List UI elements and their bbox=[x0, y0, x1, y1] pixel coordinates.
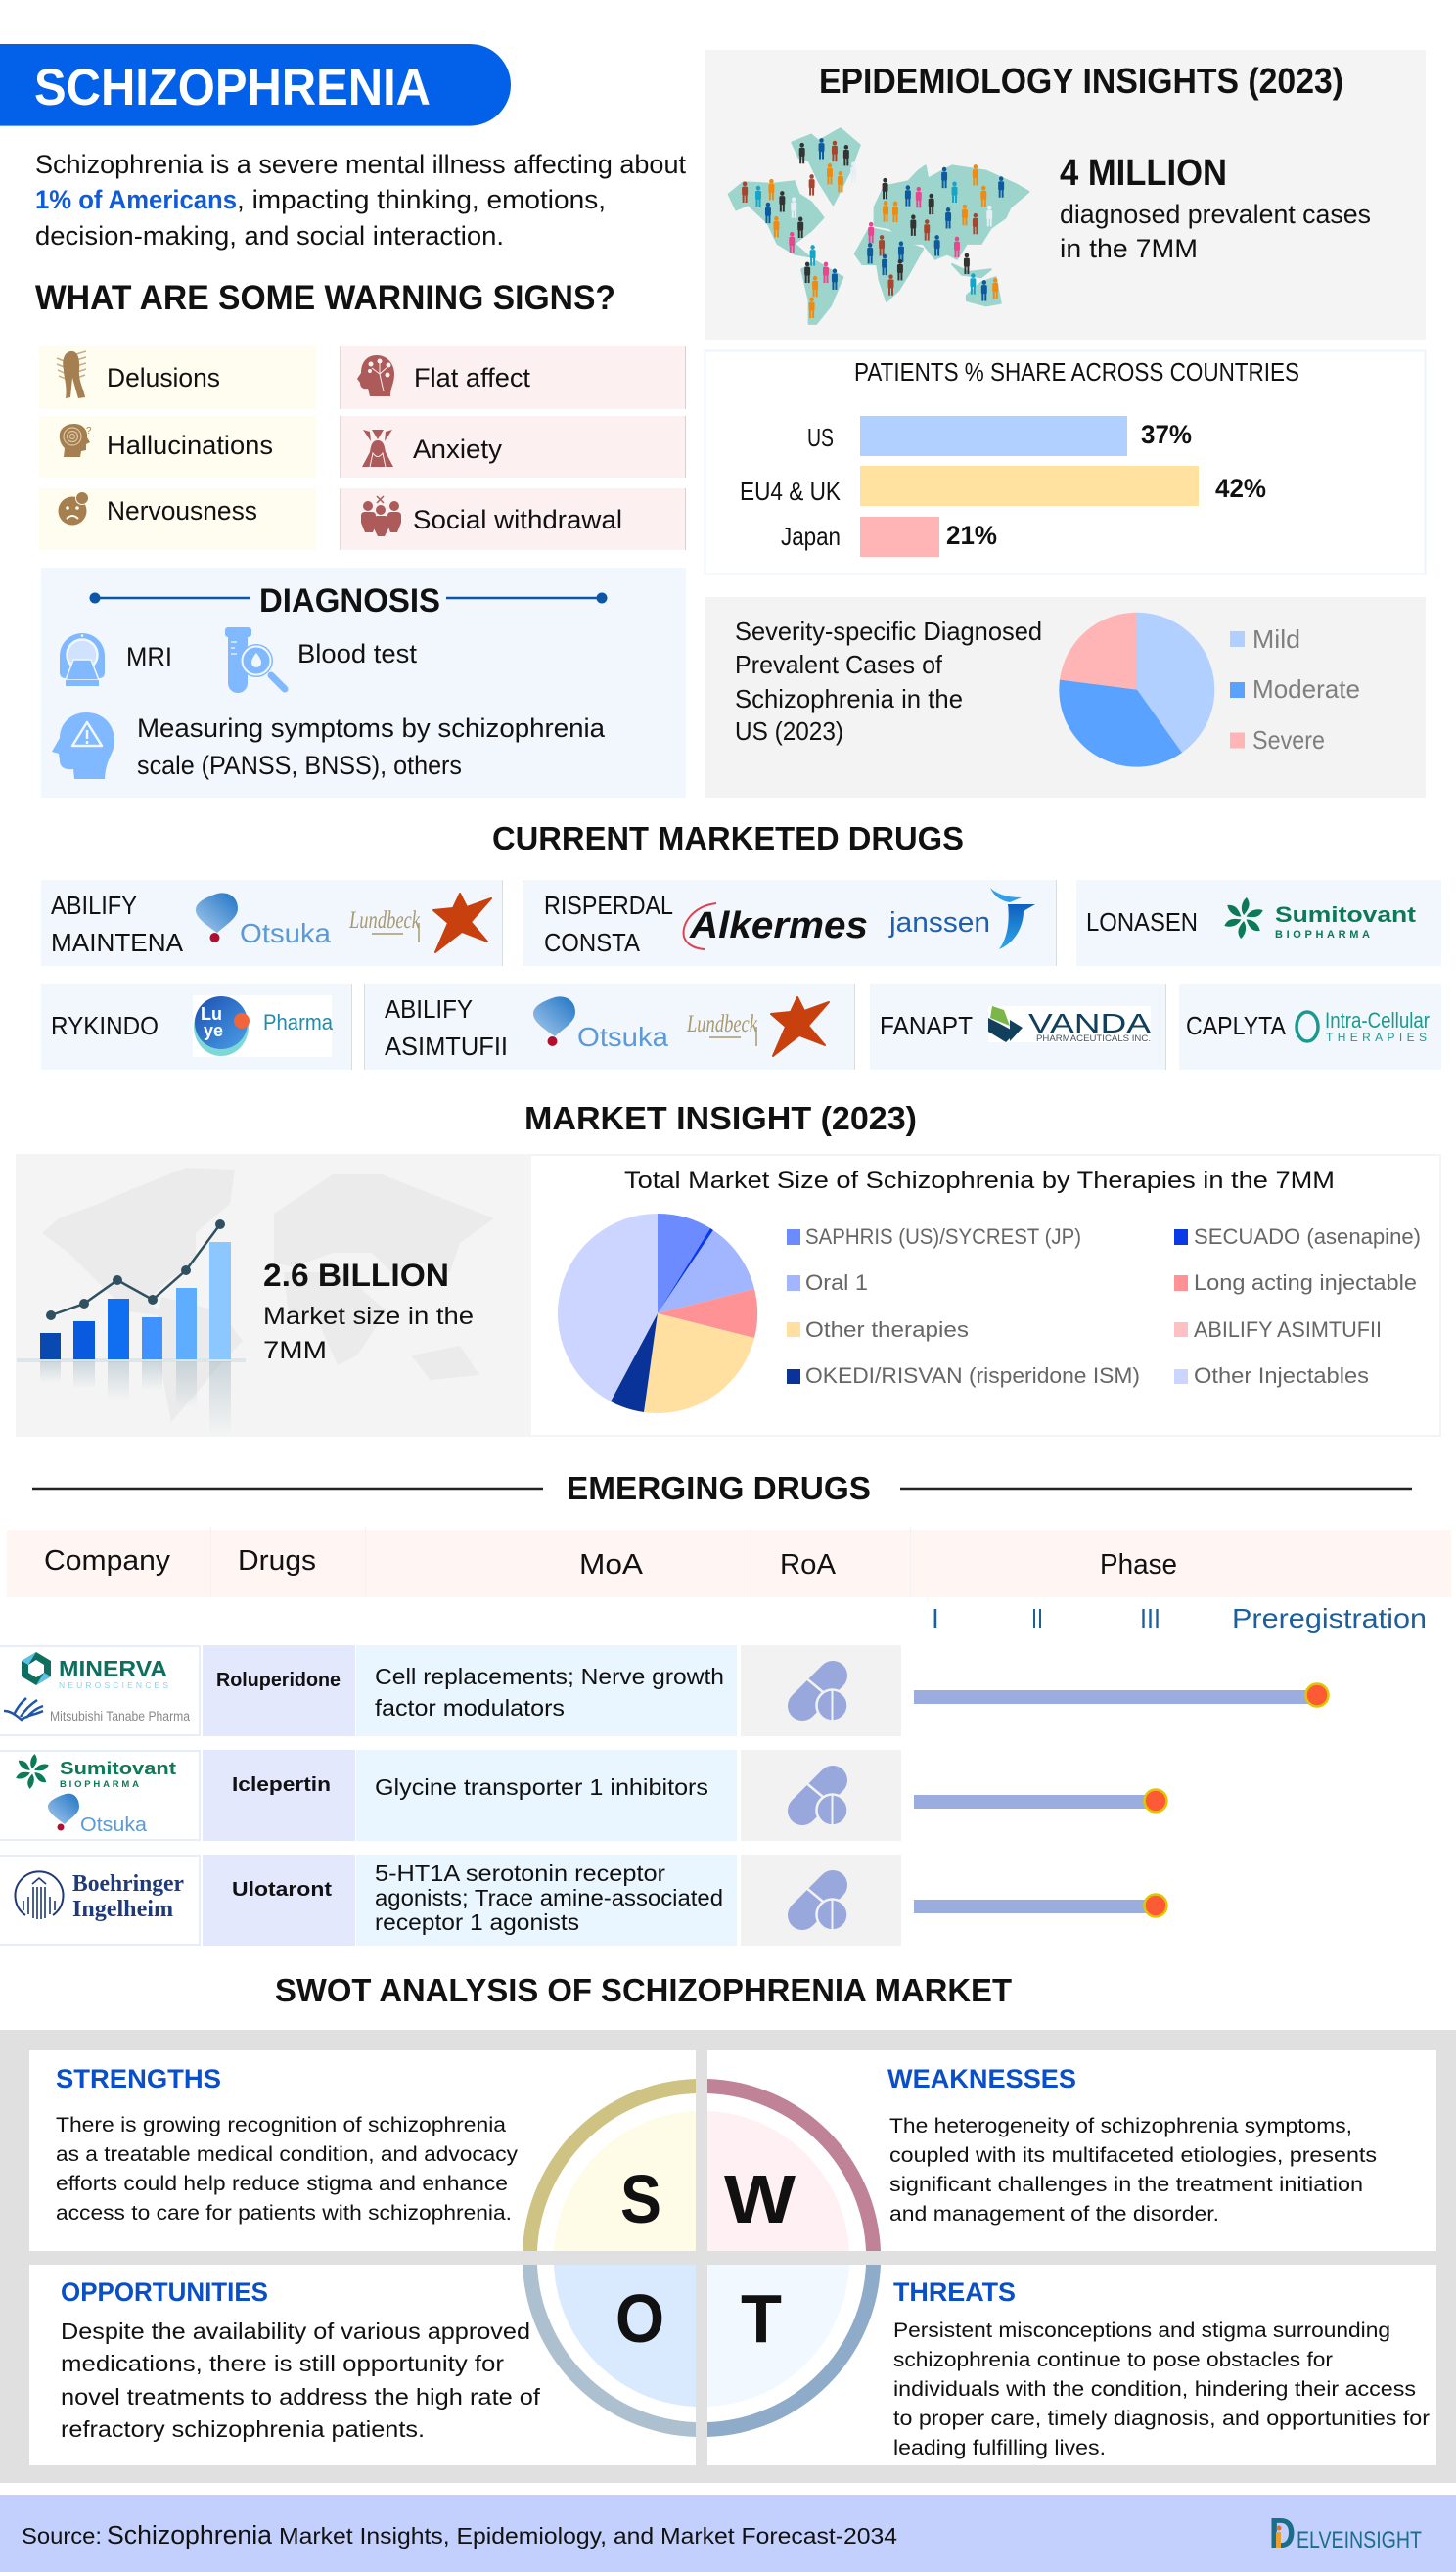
logo: Minerva: MINERVA bbox=[59, 1656, 167, 1681]
logo: Sumitovant bbox=[1223, 897, 1417, 941]
world map background bbox=[42, 1168, 494, 1422]
block: weaknesses: WEAKNESSES bbox=[887, 2064, 1076, 2093]
bar chart: market growth bbox=[17, 1219, 246, 1437]
block: strengths: access to care for patients with schizophrenia. bbox=[56, 2201, 512, 2225]
card: Risperdal Consta bbox=[523, 880, 1057, 966]
legend: severity: Severe bbox=[1252, 725, 1325, 755]
icon: pills bbox=[802, 1885, 847, 1930]
row: Roluperidone bbox=[0, 1645, 1329, 1736]
footer: source bbox=[0, 2495, 1456, 2572]
bar: EU4 and UK: 42% bbox=[1215, 474, 1266, 503]
text: symptom scale: Measuring symptoms by schizophrenia bbox=[137, 713, 606, 743]
logo: Lundbeck: Lundbeck bbox=[348, 907, 421, 934]
mechanism of action: Glycine transporter 1 inhibitors bbox=[375, 1774, 708, 1800]
logo: Sumitovant: BIOPHARMA bbox=[60, 1779, 139, 1790]
icon: MRI bbox=[60, 633, 105, 686]
bar: EU4 and UK: EU4 & UK bbox=[740, 477, 842, 506]
row: Iclepertin bbox=[0, 1750, 1166, 1841]
table header: emerging drugs: Phase bbox=[1100, 1549, 1177, 1581]
map: world with people bbox=[729, 128, 1028, 324]
legend: severity: Moderate bbox=[1252, 674, 1360, 704]
icon: blood test bbox=[225, 627, 285, 693]
mechanism of action: factor modulators bbox=[375, 1695, 565, 1721]
phase labels: Preregistration bbox=[1232, 1603, 1427, 1633]
sign: anxiety bbox=[340, 416, 686, 478]
logo: Janssen: janssen bbox=[888, 907, 990, 939]
phase labels: III bbox=[1140, 1603, 1160, 1633]
legend: therapies bbox=[787, 1224, 1421, 1388]
legend: severity: Mild bbox=[1252, 624, 1300, 654]
drug name: Ulotaront bbox=[232, 1879, 332, 1901]
intro text block: , impacting thinking, emotions, bbox=[237, 185, 606, 214]
logo: Minerva bbox=[22, 1652, 168, 1690]
heading: current marketed drugs: CURRENT MARKETED DRUGS bbox=[492, 820, 964, 856]
table header: emerging drugs: Company bbox=[44, 1545, 171, 1577]
logo: Vanda bbox=[988, 1006, 1151, 1043]
logo: Vanda: VANDA bbox=[1028, 1008, 1151, 1038]
heading: epidemiology: EPIDEMIOLOGY INSIGHTS (2023) bbox=[819, 61, 1343, 101]
stat: 2.6 billion bbox=[263, 1258, 474, 1364]
stat: 2.6 billion: Market size in the bbox=[263, 1303, 474, 1330]
block: weaknesses: coupled with its multifaceted etiologies, presents bbox=[889, 2143, 1377, 2167]
logo: Otsuka bbox=[48, 1794, 148, 1836]
phase labels bbox=[932, 1603, 1427, 1633]
block: strengths: as a treatable medical condition, and advocacy bbox=[56, 2142, 518, 2166]
bar: Japan: Japan bbox=[781, 522, 841, 551]
logo: Sumitovant: Sumitovant bbox=[60, 1758, 176, 1778]
block: opportunities: novel treatments to address the high rate of bbox=[61, 2384, 541, 2410]
panel: patients share bar chart bbox=[705, 350, 1425, 574]
card: Abilify Asimtufii: ASIMTUFII bbox=[385, 1032, 508, 1061]
legend: therapies: SAPHRIS (US)/SYCREST (JP) bbox=[805, 1224, 1081, 1249]
mechanism of action: Cell replacements; Nerve growth bbox=[375, 1664, 724, 1689]
phase bar: preregistration bbox=[914, 1683, 1329, 1707]
row: Ulotaront bbox=[0, 1855, 1166, 1946]
logo: Boehringer Ingelheim: Boehringer bbox=[72, 1871, 184, 1897]
text: severity description bbox=[735, 617, 1042, 746]
block: threats: leading fulfilling lives. bbox=[893, 2436, 1106, 2459]
legend: therapies: ABILIFY ASIMTUFII bbox=[1194, 1317, 1382, 1342]
card: Abilify Maintena: ABILIFY bbox=[51, 891, 137, 920]
block: strengths: There is growing recognition of schizophrenia bbox=[56, 2113, 506, 2136]
logo: DelveInsight: D bbox=[1269, 2509, 1296, 2557]
card: Abilify Asimtufii bbox=[364, 984, 855, 1070]
card: Rykindo bbox=[41, 984, 352, 1070]
mechanism of action: 5-HT1A serotonin receptor bbox=[375, 1860, 665, 1886]
logo: DelveInsight bbox=[1269, 2509, 1422, 2557]
intro text block: Schizophrenia is a severe mental illness affecting about bbox=[35, 150, 686, 179]
heading: warning signs: WHAT ARE SOME WARNING SIGNS? bbox=[35, 279, 615, 317]
panel: market insight bbox=[16, 1154, 1441, 1437]
heading: emerging drugs: EMERGING DRUGS bbox=[567, 1470, 871, 1506]
diagram: SWOT circle: O bbox=[615, 2280, 664, 2357]
text: severity description: US (2023) bbox=[735, 716, 843, 746]
block: strengths bbox=[56, 2064, 518, 2225]
heading: diagnosis: DIAGNOSIS bbox=[259, 582, 440, 620]
block: opportunities: Despite the availability of various approved bbox=[61, 2319, 530, 2344]
block: threats: to proper care, timely diagnosis, and opportunities for bbox=[893, 2407, 1430, 2430]
logo: Mitsubishi Tanabe Pharma: Mitsubishi Tanabe Pharma bbox=[50, 1709, 190, 1723]
block: opportunities: refractory schizophrenia patients. bbox=[61, 2416, 425, 2442]
stat: 4 million: 4 MILLION bbox=[1060, 153, 1227, 194]
legend: therapies: Long acting injectable bbox=[1194, 1270, 1417, 1295]
sign: hallucinations bbox=[39, 416, 316, 478]
card: Lonasen: LONASEN bbox=[1086, 907, 1198, 937]
logo: Luye Pharma bbox=[193, 995, 334, 1057]
logo: Sumitovant bbox=[15, 1754, 176, 1790]
logo: Boehringer Ingelheim: Ingelheim bbox=[72, 1897, 173, 1922]
block: weaknesses: and management of the disorder. bbox=[889, 2202, 1219, 2226]
block: opportunities: medications, there is still opportunity for bbox=[61, 2351, 504, 2376]
logo: Janssen bbox=[888, 888, 1035, 949]
text: symptom scale: scale (PANSS, BNSS), others bbox=[137, 751, 462, 780]
icon: pills bbox=[802, 1676, 847, 1721]
logo: Boehringer Ingelheim bbox=[16, 1871, 184, 1922]
logo: Sumitovant: Sumitovant bbox=[1275, 902, 1417, 927]
card: Fanapt bbox=[870, 984, 1166, 1070]
stat: 2.6 billion: 2.6 BILLION bbox=[263, 1258, 449, 1293]
stat: 4 million: in the 7MM bbox=[1060, 234, 1198, 263]
text: severity description: Schizophrenia in the bbox=[735, 684, 963, 713]
block: opportunities bbox=[61, 2277, 541, 2442]
sign: hallucinations: ? bbox=[86, 426, 92, 436]
logo: Intra-Cellular bbox=[1297, 1008, 1430, 1044]
panel: diagnosis bbox=[41, 568, 686, 798]
logo: Lundbeck bbox=[348, 894, 491, 952]
block: strengths: efforts could help reduce stigma and enhance bbox=[56, 2172, 508, 2195]
block: threats: individuals with the condition, hindering their access bbox=[893, 2377, 1416, 2401]
card: Caplyta: CAPLYTA bbox=[1186, 1011, 1287, 1040]
panel: severity pie bbox=[705, 597, 1426, 798]
block: threats: Persistent misconceptions and stigma surrounding bbox=[893, 2319, 1390, 2342]
sign: hallucinations: Hallucinations bbox=[107, 431, 273, 460]
legend: therapies: Other Injectables bbox=[1194, 1363, 1369, 1388]
diagram: SWOT circle: T bbox=[741, 2280, 782, 2357]
text: severity description: Prevalent Cases of bbox=[735, 650, 943, 679]
intro text block: decision-making, and social interaction. bbox=[35, 221, 504, 251]
label: blood test: Blood test bbox=[297, 639, 418, 668]
block: weaknesses: The heterogeneity of schizophrenia symptoms, bbox=[889, 2114, 1352, 2137]
diagram: SWOT circle: S bbox=[620, 2161, 661, 2237]
logo: Luye Pharma: ye bbox=[204, 1021, 223, 1040]
bar: US: 37% bbox=[1141, 420, 1192, 449]
table header: emerging drugs: Drugs bbox=[238, 1545, 316, 1577]
table header: emerging drugs: MoA bbox=[579, 1549, 644, 1581]
card: Abilify Asimtufii: ABILIFY bbox=[385, 994, 473, 1024]
block: strengths: STRENGTHS bbox=[56, 2064, 221, 2093]
logo: Luye Pharma: Lu bbox=[201, 1004, 222, 1024]
logo: Intra-Cellular: Intra-Cellular bbox=[1325, 1008, 1430, 1033]
logo: Otsuka: Otsuka bbox=[240, 918, 331, 948]
logo: Intra-Cellular: THERAPIES bbox=[1326, 1031, 1427, 1044]
block: threats: THREATS bbox=[893, 2277, 1016, 2307]
text: symptom scale bbox=[137, 713, 606, 780]
block: threats bbox=[893, 2277, 1430, 2459]
sign: social withdrawal bbox=[340, 488, 686, 550]
logo: Otsuka bbox=[196, 893, 331, 948]
phase labels: II bbox=[1031, 1603, 1043, 1633]
sign: social withdrawal: Social withdrawal bbox=[413, 505, 622, 534]
stat: 4 million: diagnosed prevalent cases bbox=[1060, 200, 1371, 229]
panel: SWOT analysis bbox=[0, 2030, 1456, 2483]
stat: 4 million bbox=[1060, 153, 1371, 263]
card: Abilify Maintena bbox=[41, 880, 503, 966]
diagram: SWOT circle bbox=[523, 2079, 881, 2437]
intro text block bbox=[35, 150, 686, 251]
phase labels: I bbox=[932, 1603, 939, 1633]
block: weaknesses bbox=[887, 2064, 1377, 2226]
stat: 2.6 billion: 7MM bbox=[263, 1337, 327, 1364]
block: opportunities: OPPORTUNITIES bbox=[61, 2277, 268, 2307]
logo: DelveInsight: ELVEINSIGHT bbox=[1297, 2527, 1422, 2553]
sign: anxiety: Anxiety bbox=[413, 435, 503, 464]
mechanism of action bbox=[375, 1860, 723, 1935]
title banner: SCHIZOPHRENIA bbox=[34, 59, 431, 116]
legend: severity bbox=[1230, 624, 1360, 755]
legend: therapies: OKEDI/RISVAN (risperidone ISM) bbox=[805, 1363, 1140, 1388]
mechanism of action: receptor 1 agonists bbox=[375, 1909, 579, 1935]
heading: diagnosis bbox=[90, 582, 607, 620]
bar: Japan bbox=[781, 517, 997, 557]
diagram: SWOT circle: W bbox=[724, 2161, 796, 2237]
legend: therapies: SECUADO (asenapine) bbox=[1194, 1224, 1421, 1249]
panel: epidemiology insights bbox=[705, 50, 1426, 340]
text: severity description: Severity-specific Diagnosed bbox=[735, 617, 1042, 646]
label: MRI: MRI bbox=[126, 642, 172, 671]
panel: warning signs bbox=[39, 346, 686, 550]
mechanism of action: agonists; Trace amine-associated bbox=[375, 1885, 723, 1910]
logo: Lundbeck: Lundbeck bbox=[686, 1011, 758, 1037]
logo: Otsuka bbox=[533, 996, 668, 1052]
intro text block: 1% of Americans bbox=[35, 185, 237, 214]
card: Lonasen bbox=[1076, 880, 1441, 966]
pie chart: therapies bbox=[558, 1214, 757, 1413]
card: Risperdal Consta: RISPERDAL bbox=[544, 891, 673, 920]
card: Rykindo: RYKINDO bbox=[51, 1011, 159, 1040]
phase bar: phase III bbox=[914, 1895, 1166, 1916]
mechanism of action bbox=[375, 1664, 724, 1721]
table header: emerging drugs: RoA bbox=[780, 1549, 837, 1581]
card: Fanapt: FANAPT bbox=[880, 1011, 973, 1040]
card: Abilify Maintena: MAINTENA bbox=[51, 928, 184, 957]
phase bar: phase III bbox=[914, 1789, 1166, 1813]
bar: Japan: 21% bbox=[946, 521, 997, 550]
block: weaknesses: significant challenges in the treatment initiation bbox=[889, 2173, 1363, 2196]
sign: nervousness: Nervousness bbox=[107, 496, 257, 526]
source text: Schizophrenia bbox=[107, 2522, 273, 2549]
logo: Luye Pharma: Pharma bbox=[263, 1010, 334, 1034]
heading: market insight: MARKET INSIGHT (2023) bbox=[524, 1100, 917, 1136]
chart title: PATIENTS % SHARE ACROSS COUNTRIES bbox=[854, 357, 1299, 387]
bar: US: US bbox=[807, 423, 834, 452]
logo: Otsuka: Otsuka bbox=[577, 1022, 668, 1052]
sign: flat affect: Flat affect bbox=[414, 363, 530, 392]
sign: delusions bbox=[39, 346, 316, 409]
heading: SWOT: SWOT ANALYSIS OF SCHIZOPHRENIA MARKET bbox=[275, 1972, 1012, 2008]
drug name: Roluperidone bbox=[216, 1670, 341, 1691]
source text: Source: bbox=[22, 2523, 102, 2549]
block: threats: schizophrenia continue to pose obstacles for bbox=[893, 2348, 1333, 2371]
logo: Sumitovant: BIOPHARMA bbox=[1275, 929, 1370, 941]
logo: Alkermes: Alkermes bbox=[689, 905, 868, 946]
panel: therapies pie chart bbox=[531, 1156, 1439, 1435]
logo: Lundbeck bbox=[686, 997, 829, 1056]
title banner bbox=[0, 44, 511, 126]
sign: nervousness bbox=[39, 488, 316, 550]
bar: US bbox=[807, 416, 1192, 456]
icon: head with warning bbox=[52, 712, 114, 779]
legend: therapies: Other therapies bbox=[805, 1317, 969, 1342]
card: Caplyta bbox=[1179, 984, 1441, 1070]
logo: Mitsubishi Tanabe Pharma bbox=[4, 1698, 190, 1723]
sign: flat affect bbox=[340, 346, 686, 409]
drug name: Iclepertin bbox=[232, 1774, 331, 1796]
logo: Otsuka: Otsuka bbox=[80, 1814, 148, 1836]
legend: therapies: Oral 1 bbox=[805, 1270, 868, 1295]
chart title: Total Market Size of Schizophrenia by Therapies in the 7MM bbox=[624, 1168, 1335, 1194]
pie chart: severity bbox=[1059, 613, 1214, 767]
logo: Vanda: PHARMACEUTICALS INC. bbox=[1036, 1033, 1151, 1043]
bar: EU4 and UK bbox=[740, 466, 1266, 506]
table header: emerging drugs bbox=[7, 1527, 1451, 1597]
sign: delusions: Delusions bbox=[107, 363, 220, 392]
icon: pills bbox=[802, 1780, 847, 1826]
source text bbox=[22, 2522, 897, 2549]
source text: Market Insights, Epidemiology, and Market Forecast-2034 bbox=[279, 2523, 897, 2549]
card: Risperdal Consta: CONSTA bbox=[544, 928, 641, 957]
logo: Minerva: NEUROSCIENCES bbox=[59, 1680, 168, 1690]
